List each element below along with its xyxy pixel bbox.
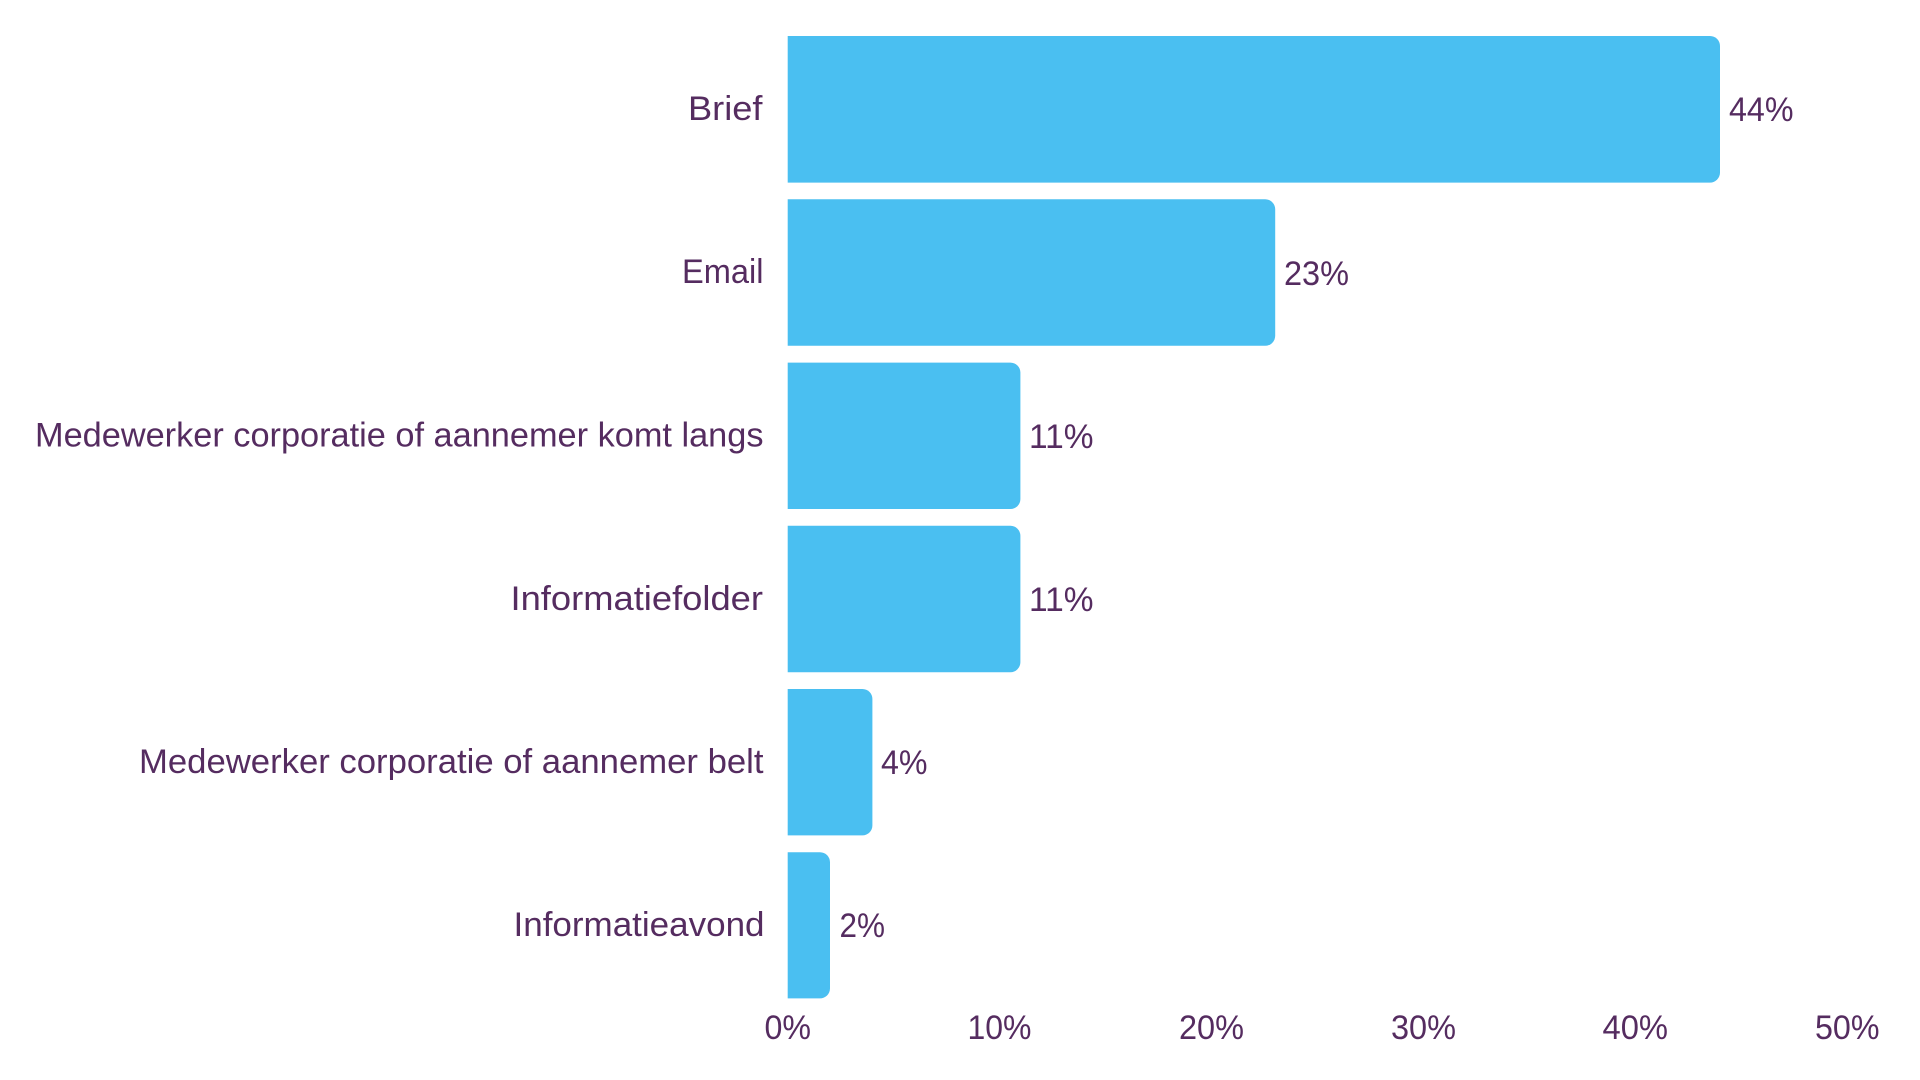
value: 11%: 11% <box>1029 581 1094 619</box>
x axis labels <box>764 1009 1880 1047</box>
bar: Email 23% <box>788 199 1275 346</box>
bars <box>788 36 1720 998</box>
category labels <box>35 90 764 944</box>
bar: Brief 44% <box>788 36 1720 183</box>
tick: 20%: 20% <box>1179 1009 1244 1047</box>
tick: 0%: 0% <box>764 1009 811 1047</box>
value labels <box>840 91 1794 945</box>
value: 2%: 2% <box>840 907 885 945</box>
tick: 50%: 50% <box>1815 1009 1880 1047</box>
value: 11%: 11% <box>1029 418 1094 456</box>
label: Informatiefolder: Informatiefolder <box>510 580 763 618</box>
label: Medewerker belt: Medewerker corporatie of aannemer belt <box>139 743 764 781</box>
tick: 40%: 40% <box>1602 1009 1668 1047</box>
label: Informatieavond: Informatieavond <box>514 906 764 944</box>
bar: Informatieavond 2% <box>788 852 830 998</box>
value: 44%: 44% <box>1729 91 1794 129</box>
label: Email: Email <box>682 253 764 291</box>
value: 23%: 23% <box>1284 255 1349 293</box>
tick: 10%: 10% <box>968 1009 1032 1047</box>
bar: Medewerker belt 4% <box>788 689 872 835</box>
bar: Informatiefolder 11% <box>788 526 1020 672</box>
value: 4%: 4% <box>881 744 928 782</box>
label: Medewerker komt langs: Medewerker corporatie of aannemer komt langs <box>35 416 764 454</box>
tick: 30%: 30% <box>1391 1009 1456 1047</box>
bar: Medewerker komt langs 11% <box>788 363 1020 509</box>
label: Brief: Brief <box>688 90 763 128</box>
